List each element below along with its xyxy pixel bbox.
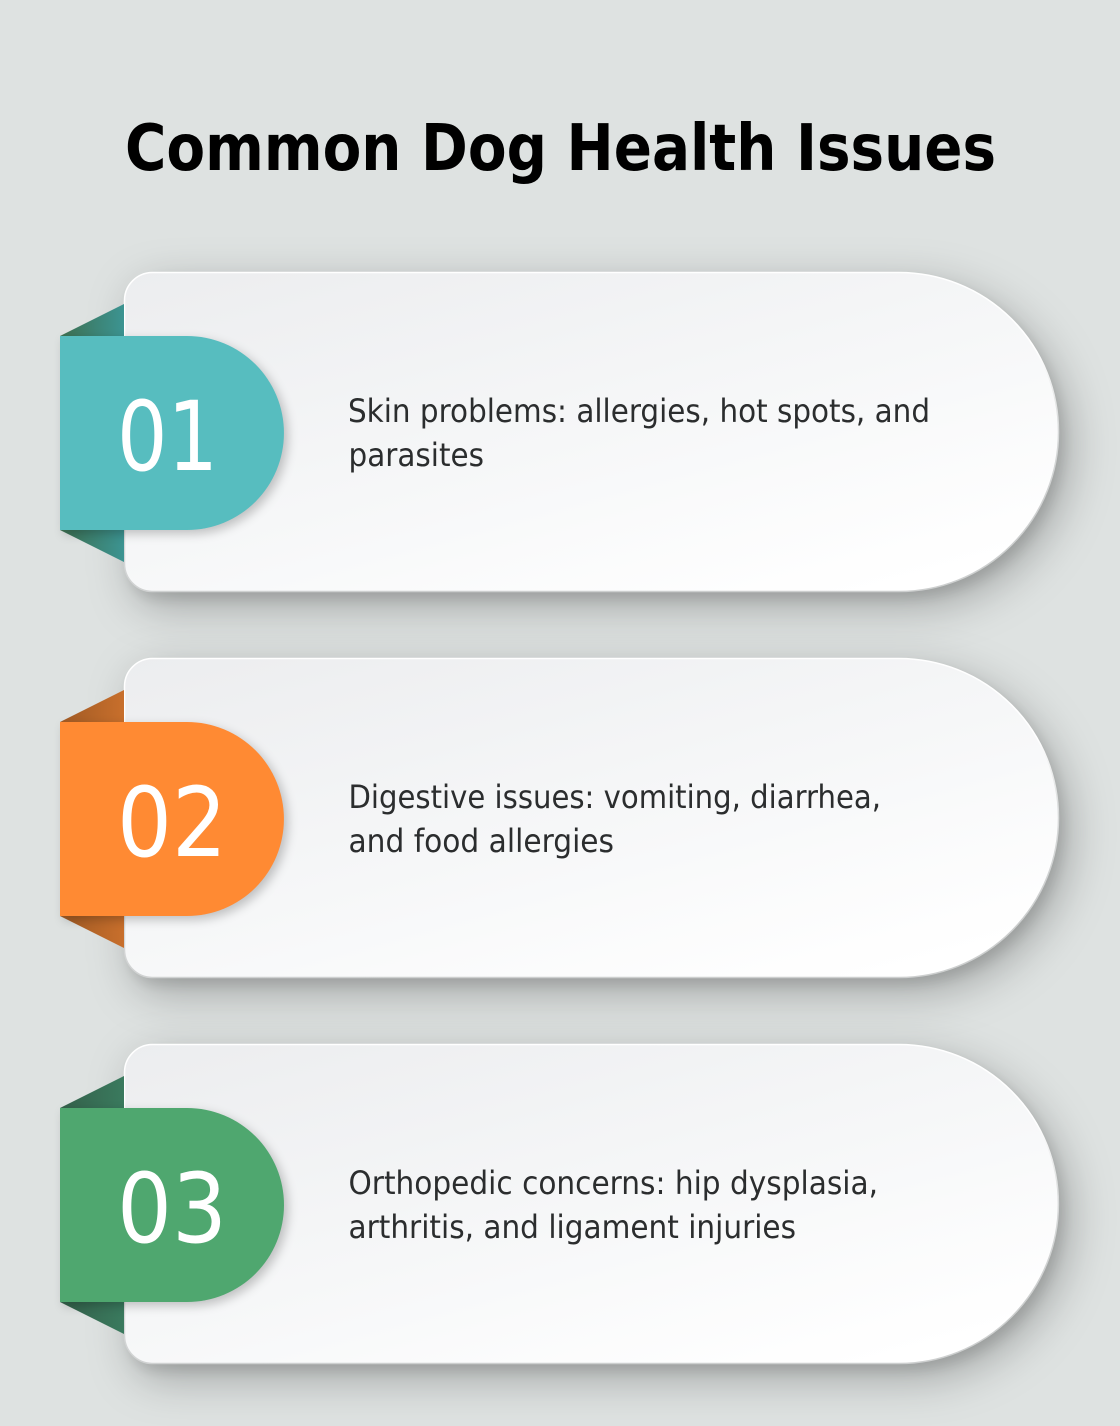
ribbon folds 03 <box>60 1076 124 1334</box>
card 01 <box>124 272 1058 592</box>
card 02 <box>124 658 1058 978</box>
ribbon folds 02 <box>60 690 124 948</box>
description 02: and food allergies <box>348 822 614 860</box>
number badge 01 <box>60 336 284 530</box>
ribbon folds 01 <box>60 304 124 562</box>
description 03: Orthopedic concerns: hip dysplasia, <box>348 1164 878 1202</box>
description 02: Digestive issues: vomiting, diarrhea, <box>348 778 881 816</box>
number 03: 03 <box>117 1153 227 1265</box>
description 01 <box>348 392 930 474</box>
description 01: Skin problems: allergies, hot spots, and <box>348 392 930 430</box>
description 01: parasites <box>348 436 484 474</box>
panel: step 02 digestive issues <box>60 658 1058 978</box>
description 02 <box>348 778 881 860</box>
description 03 <box>348 1164 878 1246</box>
number badge 03 <box>60 1108 284 1302</box>
card 03 <box>124 1044 1058 1364</box>
number 02: 02 <box>117 767 227 879</box>
number badge 02 <box>60 722 284 916</box>
number 01: 01 <box>117 381 218 493</box>
description 03: arthritis, and ligament injuries <box>348 1208 796 1246</box>
panel: step 03 orthopedic concerns <box>60 1044 1058 1364</box>
panel: step 01 skin problems <box>60 272 1058 592</box>
title: Common Dog Health Issues <box>125 112 996 186</box>
